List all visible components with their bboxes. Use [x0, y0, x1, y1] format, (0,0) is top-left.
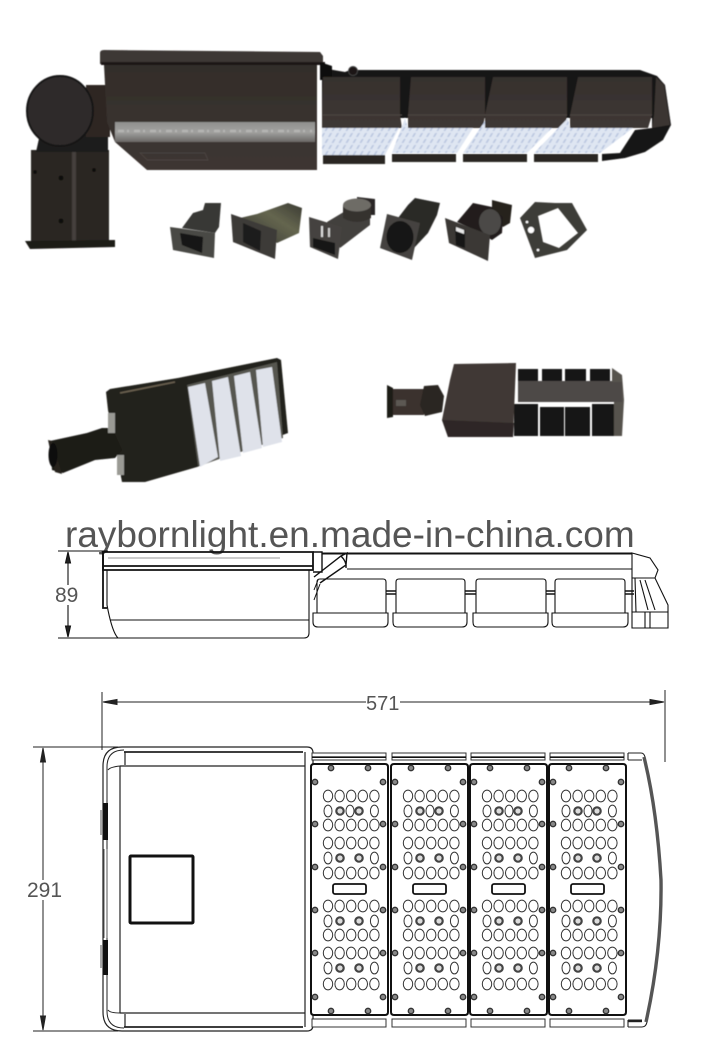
product photo: rear heat sink view	[387, 363, 624, 437]
accessory 6	[520, 202, 587, 258]
side module 3	[473, 579, 548, 627]
lower fins	[514, 404, 617, 436]
dimension 291	[27, 747, 118, 1031]
central bar	[518, 381, 622, 402]
end cap plan	[628, 753, 661, 1027]
mounting bracket	[25, 85, 115, 249]
accessory 3	[309, 197, 375, 259]
dimension 89	[55, 551, 118, 638]
LED module 3	[463, 77, 567, 162]
hinge arm	[313, 552, 632, 600]
side module 2	[393, 579, 467, 627]
accessory 1	[170, 203, 221, 258]
LED module 4	[534, 77, 652, 162]
round arm joint	[27, 76, 93, 146]
side elevation drawing	[55, 551, 668, 638]
driver box plan	[103, 747, 313, 1031]
upper fins	[518, 369, 610, 382]
access cover square	[130, 856, 193, 923]
end cap	[612, 368, 624, 436]
pole arm	[48, 413, 124, 475]
accessory 2	[231, 203, 302, 259]
LED module plates	[311, 753, 388, 1027]
dimension 89: 89	[55, 584, 78, 607]
side module 4	[552, 579, 628, 627]
dimension 571	[102, 690, 665, 762]
side hinges	[101, 803, 108, 975]
side end cap	[632, 553, 668, 628]
plan view drawing	[27, 690, 665, 1031]
mounting accessories row	[170, 197, 587, 261]
end cap right	[652, 77, 670, 128]
rear bar and end cap	[322, 68, 671, 161]
LED panel strips	[188, 367, 282, 467]
LED module 1	[322, 77, 402, 164]
accessory 4	[380, 198, 440, 260]
driver housing	[100, 50, 358, 170]
dimension 571: 571	[366, 693, 399, 715]
LED module 2	[392, 77, 485, 162]
driver housing outline	[103, 552, 313, 638]
driver box	[442, 363, 516, 437]
module connectors	[386, 591, 634, 594]
arm and joint	[387, 385, 444, 418]
dimension 291: 291	[27, 879, 62, 902]
product photo: angled LED face view	[48, 358, 288, 482]
luminaire housing	[106, 358, 288, 482]
side module 1	[313, 579, 388, 627]
watermark text: raybornlight.en.made-in-china.com	[65, 514, 635, 555]
accessory 5	[445, 200, 512, 261]
product photo: luminaire side view	[25, 50, 671, 249]
